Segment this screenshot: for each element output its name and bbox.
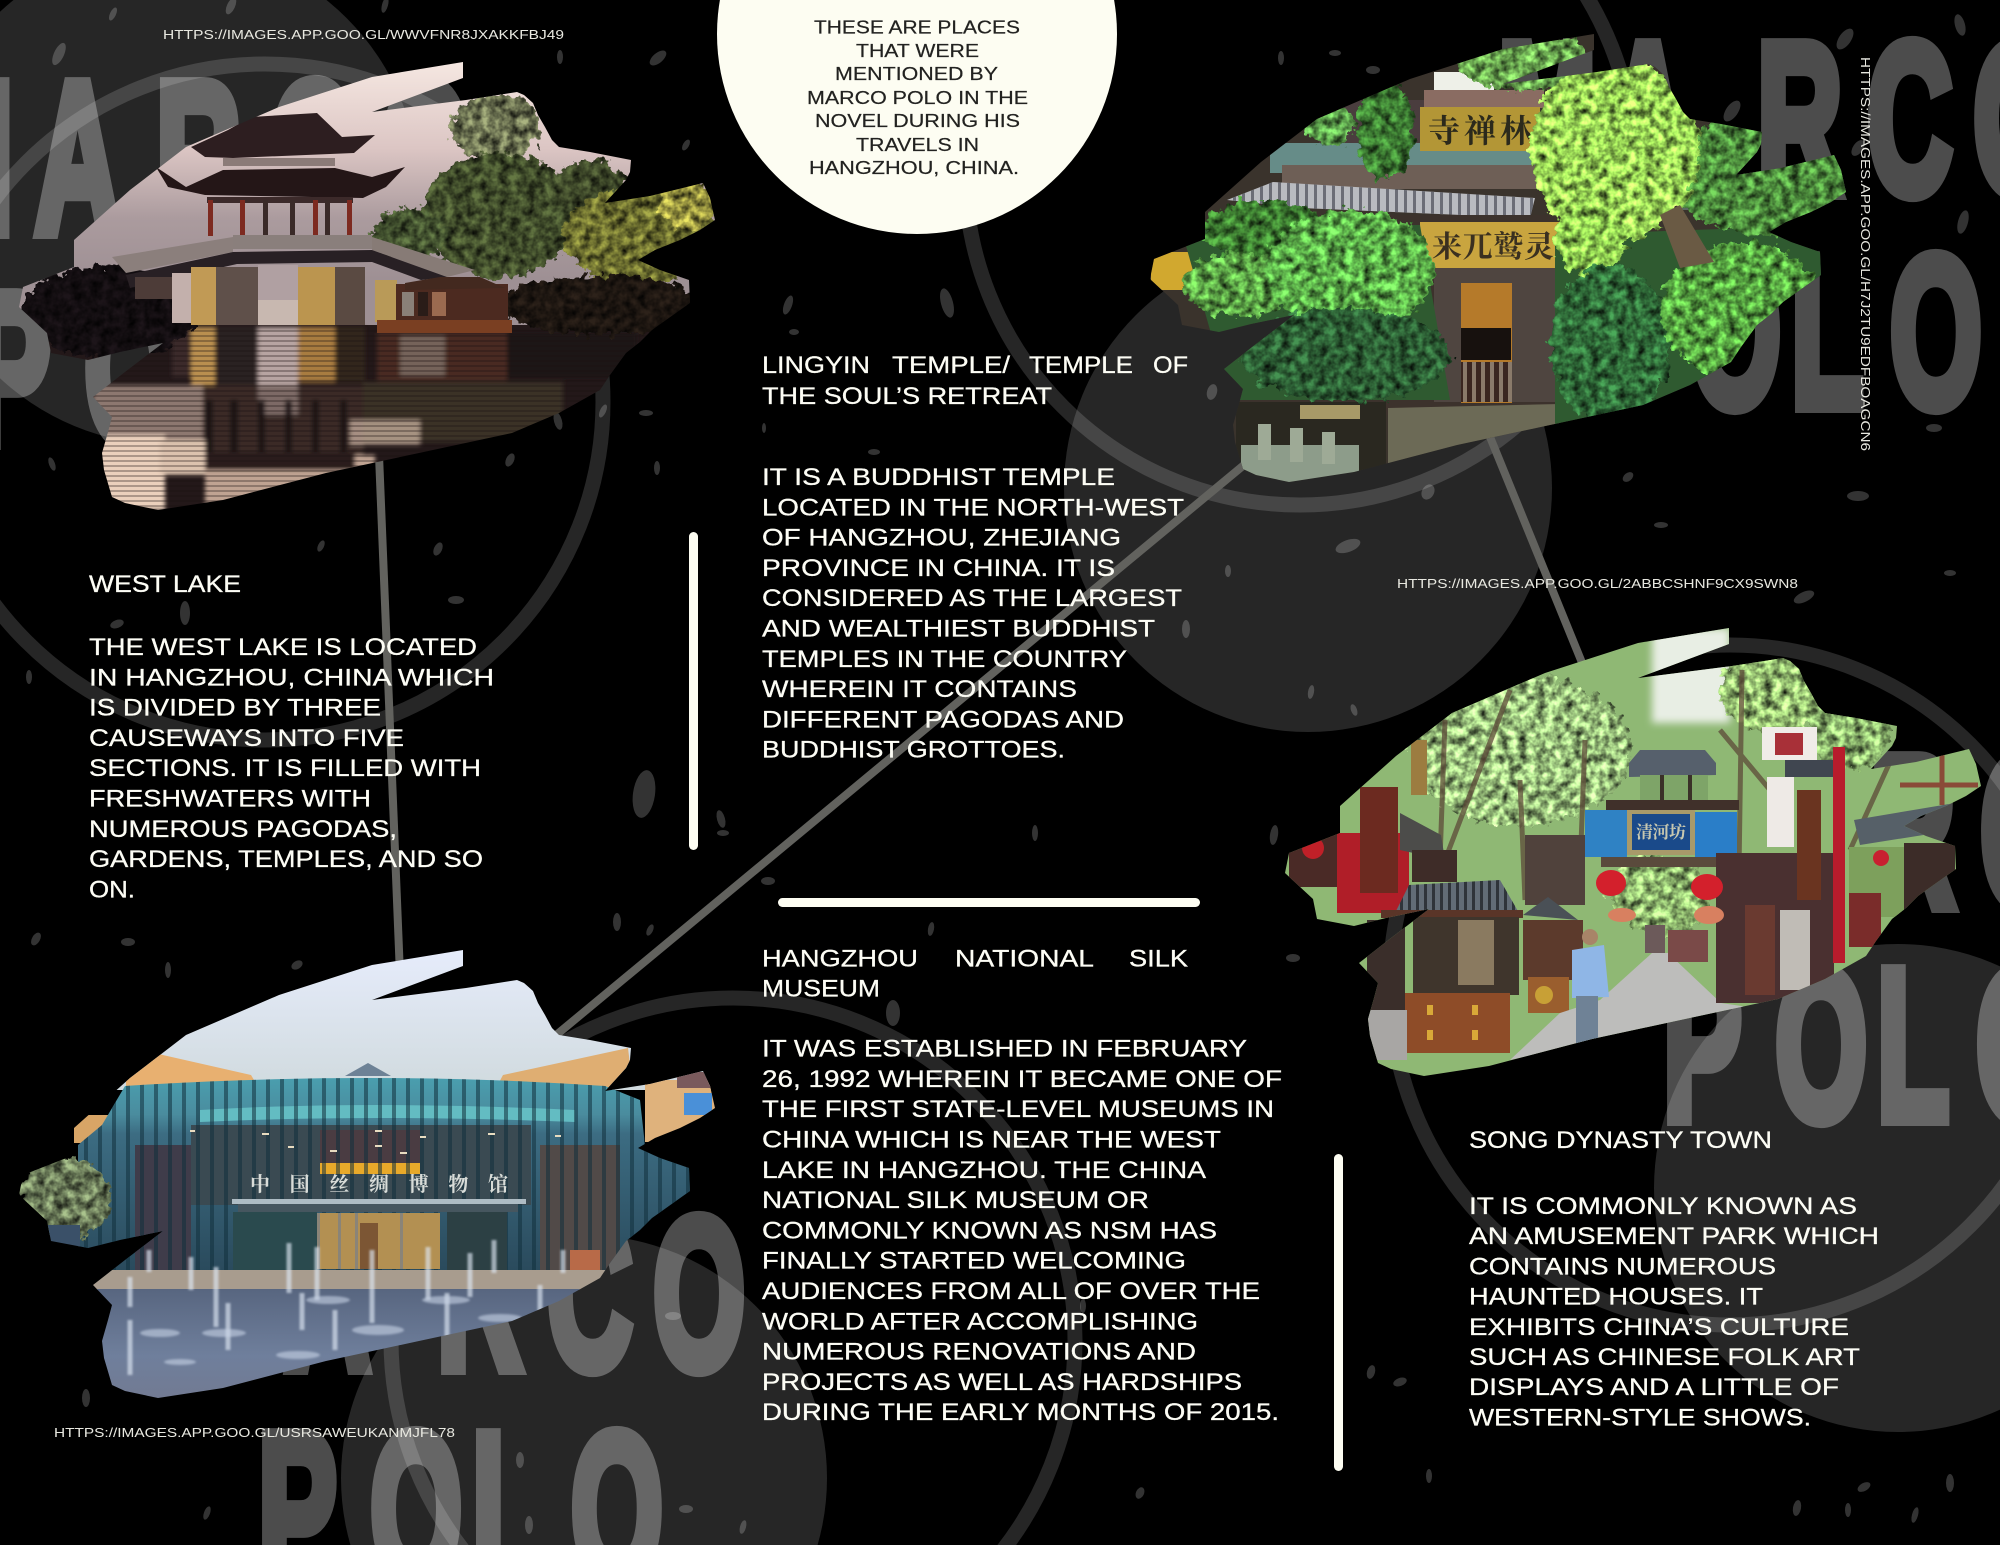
- text block: Hangzhou National Silk Museum: [762, 946, 1282, 1426]
- text block: Lingyin Temple: OF HANGZHOU, ZHEJIANG: [762, 525, 1121, 552]
- lake reflections: [93, 327, 637, 510]
- connector lines: [379, 432, 1585, 1036]
- temple sign middle: 来兀鹫灵: [1432, 231, 1554, 264]
- text block: West Lake: IS DIVIDED BY THREE: [89, 695, 381, 722]
- photo: Lingyin Temple: [1140, 30, 1860, 500]
- text block: West Lake: SECTIONS. IT IS FILLED WITH: [89, 755, 481, 782]
- text block: Hangzhou National Silk Museum: LAKE IN HANGZHOU. THE CHINA: [762, 1157, 1207, 1184]
- text block: Song Dynasty Town: WESTERN-STYLE SHOWS.: [1469, 1404, 1811, 1431]
- heading: Lingyin Temple: TEMPLE/: [892, 352, 1010, 379]
- intro circle text: [807, 18, 1028, 178]
- text block: Hangzhou National Silk Museum: NUMEROUS RENOVATIONS AND: [762, 1339, 1196, 1366]
- text block: Song Dynasty Town: CONTAINS NUMEROUS: [1469, 1253, 1776, 1280]
- text block: Hangzhou National Silk Museum: FINALLY STARTED WELCOMING: [762, 1248, 1186, 1275]
- white divider bars: [689, 532, 1343, 1471]
- watermark titles: Marco Polo: MARCO: [178, 1173, 745, 1414]
- left shop row: [1289, 740, 1457, 913]
- heading: Song Dynasty Town: SONG DYNASTY TOWN: [1469, 1127, 1772, 1154]
- source URL: Silk Museum: HTTPS://IMAGES.APP.GOO.GL/USRSAWEUKANMJFL78: [54, 1426, 455, 1440]
- text block: Lingyin Temple: CONSIDERED AS THE LARGEST: [762, 585, 1182, 612]
- left trees: [19, 1156, 111, 1240]
- text block: Hangzhou National Silk Museum: COMMONLY KNOWN AS NSM HAS: [762, 1217, 1217, 1244]
- text block: Hangzhou National Silk Museum: IT WAS ESTABLISHED IN FEBRUARY: [762, 1036, 1247, 1063]
- text block: Song Dynasty Town: EXHIBITS CHINA’S CULTURE: [1469, 1314, 1849, 1341]
- text block: Hangzhou National Silk Museum: AUDIENCES FROM ALL OF OVER THE: [762, 1278, 1260, 1305]
- street: [1510, 953, 1748, 1060]
- text block: Song Dynasty Town: HAUNTED HOUSES. IT: [1469, 1284, 1763, 1311]
- heading: Lingyin Temple: THE SOUL’S RETREAT: [762, 383, 1052, 410]
- text block: Lingyin Temple: AND WEALTHIEST BUDDHIST: [762, 616, 1155, 642]
- text block: Lingyin Temple: PROVINCE IN CHINA. IT IS: [762, 555, 1115, 582]
- text block: Lingyin Temple: BUDDHIST GROTTOES.: [762, 737, 1065, 764]
- right shop row: [1716, 727, 1978, 1003]
- trees: [20, 94, 718, 358]
- text block: Lingyin Temple: LOCATED IN THE NORTH-WEST: [762, 494, 1184, 521]
- boat: [375, 277, 512, 333]
- intro circle text: TRAVELS IN: [856, 135, 979, 155]
- museum name on facade: 中国丝绸博物馆: [250, 1172, 508, 1196]
- text block: Song Dynasty Town: AN AMUSEMENT PARK WHICH: [1469, 1223, 1879, 1250]
- text block: Song Dynasty Town: IT IS COMMONLY KNOWN AS: [1469, 1193, 1857, 1220]
- willow trees: [1410, 645, 1890, 935]
- temple sign top: 寺禅林: [1428, 113, 1532, 149]
- foliage underlay: [1180, 225, 1830, 425]
- text block: West Lake: CAUSEWAYS INTO FIVE: [89, 725, 404, 752]
- text block: West Lake: ON.: [89, 876, 135, 904]
- text block: West Lake: FRESHWATERS WITH: [89, 786, 371, 812]
- intro circle text: MENTIONED BY: [835, 64, 998, 84]
- ceiling lights: [190, 1130, 561, 1154]
- text block: West Lake: THE WEST LAKE IS LOCATED: [89, 634, 477, 661]
- gate and blue sign: [1585, 750, 1748, 867]
- heading: Hangzhou National Silk Museum: NATIONAL: [955, 946, 1094, 972]
- stone railing: [1241, 424, 1359, 485]
- heading: Lingyin Temple: [762, 352, 1188, 410]
- heading: Hangzhou National Silk Museum: [762, 946, 1189, 1002]
- temple roof: [1227, 182, 1535, 218]
- intro circle text: MARCO POLO IN THE: [807, 88, 1028, 108]
- intro circle text: THAT WERE: [856, 41, 979, 61]
- text block: Hangzhou National Silk Museum: WORLD AFTER ACCOMPLISHING: [762, 1308, 1198, 1335]
- heading: Lingyin Temple: LINGYIN: [762, 352, 870, 379]
- foliage: [1182, 34, 1860, 425]
- heading: Lingyin Temple: TEMPLE: [1029, 352, 1133, 379]
- text block: Lingyin Temple: IT IS A BUDDHIST TEMPLE: [762, 464, 1115, 491]
- intro circle text: HANGZHOU, CHINA.: [809, 158, 1019, 178]
- text block: West Lake: [89, 571, 494, 904]
- tree trunks: [1440, 670, 1900, 1003]
- red lanterns: [1596, 870, 1724, 924]
- text block: Lingyin Temple: WHEREIN IT CONTAINS: [762, 676, 1077, 703]
- text block: West Lake: NUMEROUS PAGODAS,: [89, 816, 397, 843]
- fountains: [130, 1240, 563, 1375]
- intro circle: [717, 0, 1117, 234]
- heading: West Lake: WEST LAKE: [89, 571, 241, 598]
- text block: Hangzhou National Silk Museum: CHINA WHICH IS NEAR THE WEST: [762, 1126, 1221, 1154]
- photo: Song Dynasty Town: [1280, 620, 2000, 1090]
- heading: Hangzhou National Silk Museum: HANGZHOU: [762, 946, 918, 972]
- source URL: West Lake: HTTPS://IMAGES.APP.GOO.GL/WWVFNR8JXAKKFBJ49: [163, 28, 564, 42]
- heading: Lingyin Temple: OF: [1153, 352, 1188, 379]
- source URL: Lingyin Temple: HTTPS://IMAGES.APP.GOO.GL/H7J2TU9EDFBOAGCN6: [1858, 57, 1872, 451]
- text block: Hangzhou National Silk Museum: THE FIRST STATE-LEVEL MUSEUMS IN: [762, 1096, 1274, 1123]
- text block: Lingyin Temple: DIFFERENT PAGODAS AND: [762, 706, 1124, 733]
- heading: Hangzhou National Silk Museum: MUSEUM: [762, 976, 880, 1002]
- text block: Lingyin Temple: [762, 352, 1188, 764]
- tree trunk: [1660, 205, 1714, 268]
- gate and blue sign: 清河坊: [1636, 822, 1686, 842]
- text block: Hangzhou National Silk Museum: PROJECTS AS WELL AS HARDSHIPS: [762, 1369, 1242, 1396]
- man in blue shirt: [1572, 929, 1609, 1044]
- text block: Song Dynasty Town: [1469, 1127, 1879, 1431]
- text block: West Lake: GARDENS, TEMPLES, AND SO: [89, 846, 483, 873]
- intro circle text: NOVEL DURING HIS: [815, 111, 1020, 131]
- stall roofs: [1381, 880, 1578, 920]
- source URL: Song Dynasty Town: HTTPS://IMAGES.APP.GOO.GL/2ABBCSHNF9CX9SWN8: [1397, 577, 1798, 591]
- far crowd: [1645, 925, 1665, 953]
- text block: Hangzhou National Silk Museum: DURING THE EARLY MONTHS OF 2015.: [762, 1399, 1279, 1426]
- main stall: [1404, 917, 1519, 1053]
- text block: West Lake: IN HANGZHOU, CHINA WHICH: [89, 664, 494, 691]
- text block: Song Dynasty Town: DISPLAYS AND A LITTLE OF: [1469, 1374, 1839, 1401]
- photo: West Lake: [0, 50, 730, 515]
- text block: Song Dynasty Town: SUCH AS CHINESE FOLK ART: [1469, 1344, 1860, 1371]
- pagoda: [112, 113, 475, 325]
- temple sign middle: [1420, 222, 1560, 268]
- watermark titles: Marco Polo: POLO: [1577, 211, 1982, 452]
- text block: Hangzhou National Silk Museum: 26, 1992 WHEREIN IT BECAME ONE OF: [762, 1066, 1282, 1093]
- text block: Hangzhou National Silk Museum: NATIONAL SILK MUSEUM OR: [762, 1187, 1149, 1214]
- intro circle text: THESE ARE PLACES: [814, 18, 1020, 38]
- photo: Hangzhou National Silk Museum: [0, 940, 730, 1404]
- text block: Lingyin Temple: TEMPLES IN THE COUNTRY: [762, 646, 1127, 673]
- heading: Hangzhou National Silk Museum: SILK: [1129, 946, 1189, 972]
